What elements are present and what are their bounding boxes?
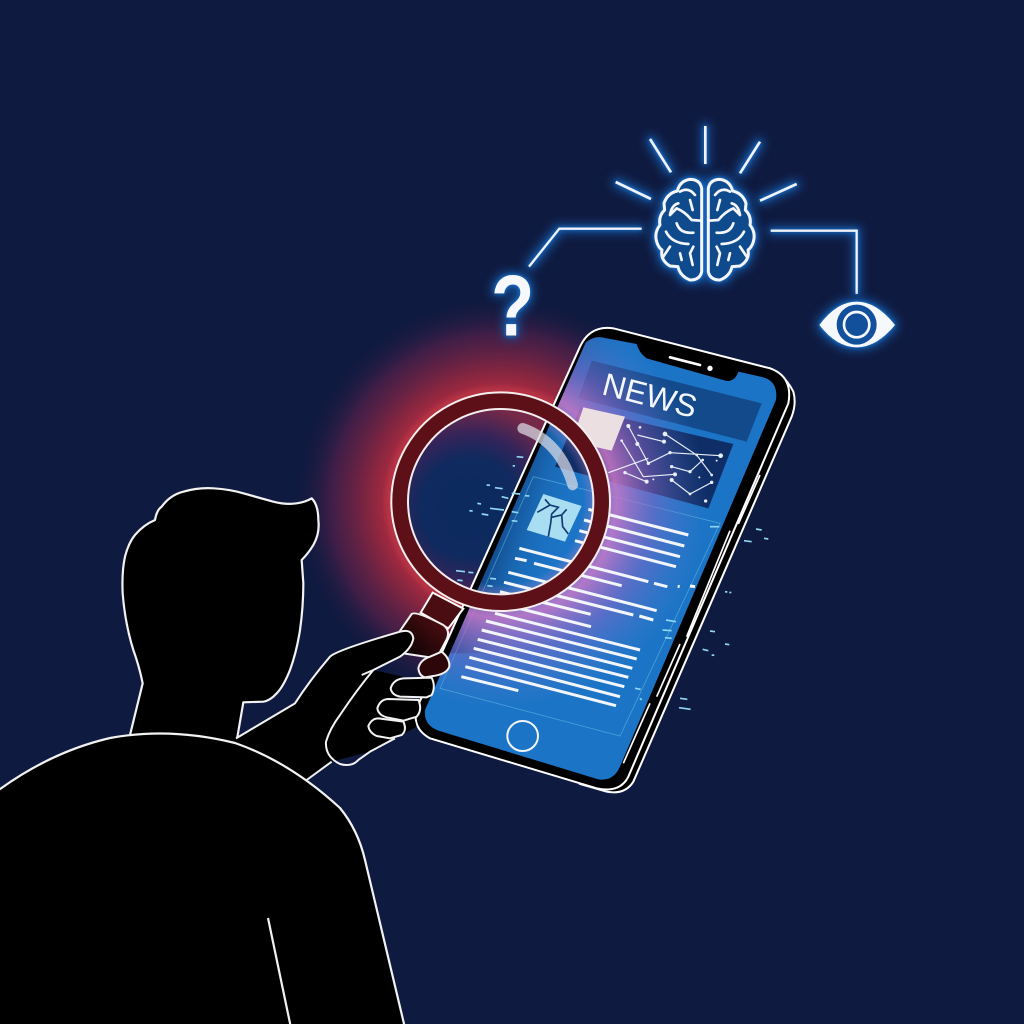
left hemisphere (656, 179, 702, 280)
arm and palm (230, 631, 417, 780)
connector to eye (771, 231, 857, 294)
magnifier lens interior (408, 409, 594, 595)
speaker and camera (670, 357, 713, 371)
red glow behind magnifying glass (295, 297, 705, 707)
finger four (368, 718, 405, 738)
pink glow on screen (436, 338, 699, 696)
thumb base (326, 670, 395, 765)
lens reflection arc (523, 428, 573, 485)
content frame (440, 477, 720, 736)
connector to question mark (529, 229, 642, 267)
head and neck (122, 488, 319, 745)
finger two (391, 678, 434, 697)
smartphone (413, 320, 795, 792)
news headline: NEWS (599, 366, 701, 425)
phone screen (425, 337, 776, 780)
magnifier handle (421, 593, 463, 628)
wrist line (307, 762, 332, 780)
right hemisphere (708, 179, 754, 280)
image placeholder (578, 407, 625, 451)
knowledge diagram icons (491, 126, 895, 354)
magnifier grip (398, 613, 448, 658)
cracked image (527, 494, 582, 542)
data glitch fragments (456, 457, 768, 709)
data panel (555, 408, 733, 508)
article text lines (461, 509, 695, 706)
home button (507, 721, 538, 751)
finger one (418, 652, 449, 677)
left brain folds (663, 190, 701, 265)
phone back edge (580, 368, 795, 792)
arm crease (268, 918, 291, 1024)
icon: question mark: ? (491, 258, 534, 354)
finger three (377, 699, 420, 721)
magnifying glass (391, 392, 610, 628)
person silhouette (0, 488, 449, 1024)
glowing red rim around the lens (389, 390, 613, 614)
light rays (616, 126, 797, 201)
side rail lines (623, 475, 760, 763)
torso (0, 734, 405, 1024)
right brain folds (709, 190, 747, 265)
screen content (436, 337, 762, 752)
news header band (578, 361, 762, 442)
icon: brain (656, 179, 754, 280)
magnifier ring (391, 392, 610, 611)
phone body (416, 328, 789, 789)
network graph (608, 424, 723, 503)
lens darkening on screen (450, 338, 604, 654)
icon: eye (819, 302, 895, 347)
hand and arm (230, 613, 449, 780)
